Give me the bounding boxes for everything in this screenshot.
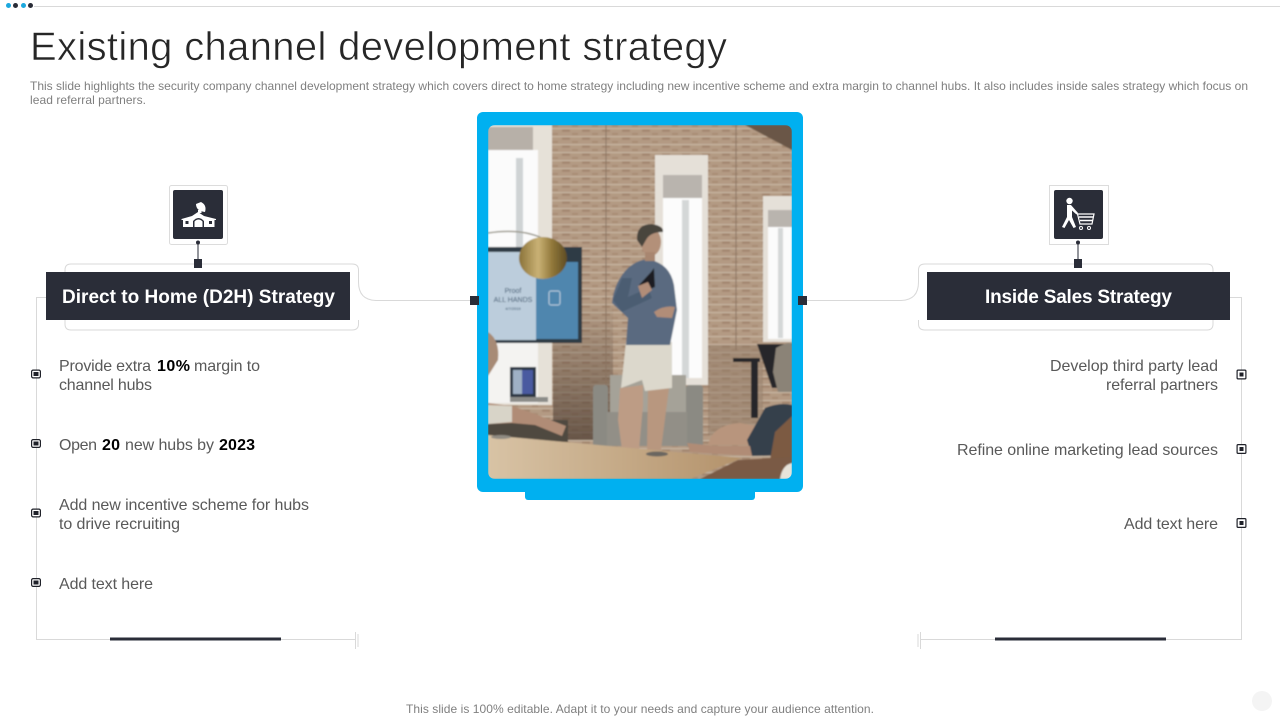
title: Existing channel development strategy [30,25,727,69]
list item: incentive scheme [59,497,309,533]
list item: extra margin: margin to [194,358,260,375]
footer note: This slide is 100% editable. Adapt it to your needs and capture your audience attention. [406,702,874,716]
description text [30,79,1248,107]
list item: add text: Add text here [1124,516,1218,533]
panel: inside sales strategy [807,186,1246,649]
list item: referral partners: referral partners [1106,377,1218,394]
photo: presenter in brick room [488,125,792,479]
description text: This slide highlights the security company channel development strategy which covers direct to home strategy including new incentive scheme and extra margin to channel hubs. It also includes inside sales strategy which focus on [30,79,1248,93]
list item: new hubs: 20 [102,437,120,454]
photo: presenter in brick room: ALL HANDS [494,297,533,304]
description text: lead referral partners. [30,93,146,107]
list item: extra margin: channel hubs [59,377,152,394]
list item: incentive scheme: to drive recruiting [59,516,180,533]
icon: person pushing cart [1050,186,1108,244]
page number badge [1252,691,1272,711]
list item: add text: Add text here [59,576,153,593]
list item: extra margin [59,358,260,394]
heading: inside sales: Inside Sales Strategy [985,287,1172,308]
photo: presenter in brick room: Proof [505,288,521,295]
icon connector [1074,240,1082,268]
photo: presenter in brick room: 4/7/2019 [505,306,522,311]
list item: referral partners: Develop third party lead [1050,358,1218,375]
left frame lines [36,264,470,649]
bullet markers [1237,370,1246,527]
icon connector [194,240,202,268]
list item: online marketing: Refine online marketing lead sources [957,442,1218,459]
list item: extra margin: 10% [157,358,190,375]
list item: new hubs [59,437,255,454]
list item: extra margin: Provide extra [59,358,151,375]
icon: satellite dish building [170,186,228,244]
right frame lines [807,264,1242,649]
list item: new hubs: 2023 [219,437,255,454]
list item: incentive scheme: Add new incentive scheme for hubs [59,497,309,514]
panel: center photo [470,112,807,500]
heading: direct to home: Direct to Home (D2H) Strategy [62,287,335,308]
photo connector squares [470,296,807,305]
heading: direct to home [46,272,350,320]
bullet markers [32,370,40,586]
list item: referral partners [1050,358,1218,394]
top decoration: dots and rule [6,3,1280,8]
list item: new hubs: Open [59,437,97,454]
heading: inside sales [927,272,1230,320]
list item: new hubs: new hubs by [125,437,214,454]
panel: direct to home strategy [32,186,470,649]
blue frame [477,112,803,500]
